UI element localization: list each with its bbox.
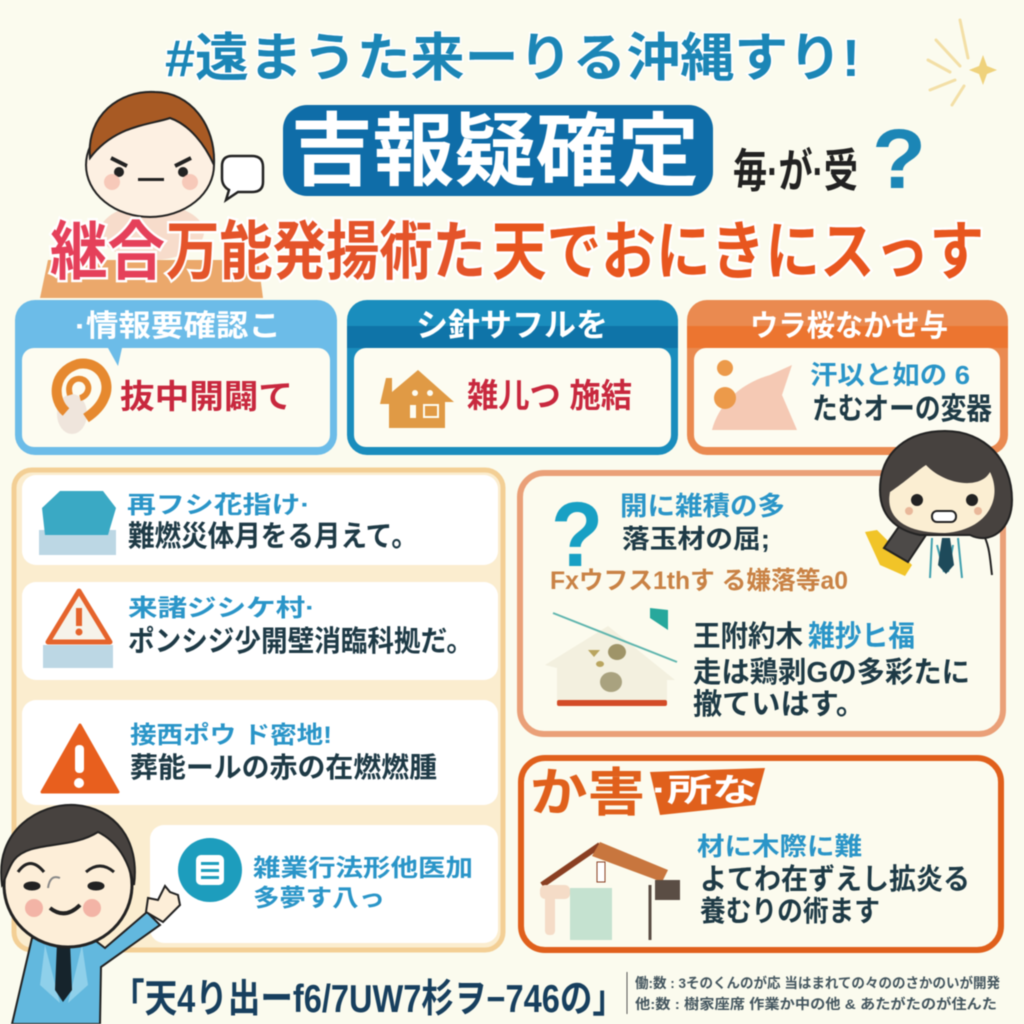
face [4, 823, 132, 947]
red headline [50, 216, 984, 288]
side caption and question mark: 毎·が·受 [733, 145, 858, 197]
blue text: 開に雑積の多 [620, 491, 785, 521]
red headline: 継合 [50, 216, 165, 288]
row 4 [150, 825, 498, 943]
card 2 house icon [380, 370, 454, 428]
woman with tool [865, 431, 1012, 578]
row 2 blue text: 来諸ジシケ村· [128, 595, 315, 622]
panel heading: ·所な [652, 772, 757, 808]
row 1 icon [39, 491, 116, 555]
sleeve [884, 522, 926, 562]
hair [880, 431, 1012, 538]
row 2 [22, 582, 498, 680]
footer divider [626, 972, 628, 1014]
tool [865, 530, 912, 576]
panel heading [530, 765, 765, 823]
orange text: Fxウフス1thす る嫌落等a0 [550, 567, 848, 595]
title line 1: #遠まうた来ーりる沖縄すり! [165, 30, 860, 88]
card 1 heading: ·情報要確認こ [75, 310, 281, 343]
dark text line 2: 走は鶏剥Gの多彩たに [693, 656, 970, 689]
blue text: 材に木際に難 [697, 833, 862, 861]
panel: card 3 [687, 300, 1008, 455]
hand [146, 886, 180, 922]
dark text line 1: よてわ在ずえし拡炎る [700, 863, 970, 896]
eyes and mouth [111, 158, 191, 181]
row 1 [22, 475, 498, 565]
house icon [545, 608, 677, 706]
red headline: 万能発揚術た [166, 216, 486, 288]
panel: card 1 [15, 300, 337, 455]
footer fine print: 働:数 : 3そのくんのが応 当はまれての々ののさかのいが開発 [635, 975, 1000, 991]
decorative sparkle [928, 20, 997, 105]
house repair icon [540, 842, 680, 940]
row 4 blue text: 雑業行法形他医加 [253, 855, 473, 882]
row 4 blue text line 2: 多夢す八っ [253, 885, 385, 912]
question mark: ? [551, 484, 603, 586]
dark text line 3: 撤ていはす。 [693, 688, 865, 721]
row 2 icon [43, 591, 113, 668]
shirt lines [930, 538, 962, 578]
lapels [40, 945, 88, 1003]
card 3 blue text: 汗以と如の 6 [810, 360, 970, 390]
man character [1, 805, 180, 1024]
card 3 dark text: たむオーの変器 [812, 393, 992, 426]
dark text: 落玉材の屈; [622, 524, 770, 554]
body line [982, 532, 992, 575]
panel: diagnosis [520, 473, 1003, 734]
row 2 dark text: ポンシジ少開壁消臨科拠だ。 [128, 625, 473, 658]
dark and blue text line 1 [693, 620, 915, 653]
footer fine print: 他:数 : 樹家座席 作業か中の他 & あたがたのが住んた [635, 996, 997, 1012]
face [86, 113, 214, 217]
hair [1, 805, 135, 885]
tie [938, 538, 954, 574]
suit [12, 912, 160, 1024]
row 3 blue text: 接西ポウ ド密地! [130, 722, 332, 749]
footer phone number: 「天4り出ーf6/7UW7杉ヲ−746の」 [112, 978, 625, 1021]
side caption and question mark [733, 112, 926, 206]
hair front [90, 92, 214, 165]
panel: repair [521, 758, 1001, 950]
card 3 heading: ウラ桜なかせ与 [750, 310, 948, 343]
panel heading: か害 [530, 765, 645, 823]
panel: left list [14, 470, 503, 950]
dark and blue text line 1: 雑抄ヒ福 [808, 620, 915, 653]
body [100, 204, 204, 260]
side caption and question mark: ? [872, 112, 926, 206]
card 2 text: 雑儿つ 施結 [467, 377, 632, 414]
dark text line 2: 養むりの術ます [700, 895, 880, 928]
card 3 icon [712, 360, 797, 430]
woman character with podium [40, 92, 263, 298]
face [889, 465, 995, 533]
main title badge: 吉報疑確定 [291, 107, 699, 196]
footer fine print [635, 975, 1000, 1012]
tie [55, 942, 72, 1002]
row 4 icon [178, 838, 242, 902]
facial features [18, 864, 114, 913]
podium [40, 260, 263, 298]
card 1 text: 抜中開闢て [120, 378, 293, 415]
row 3 [22, 700, 498, 805]
panel: card 2 [347, 300, 678, 455]
dark and blue text line 1: 王附約木 [693, 620, 803, 653]
row 3 icon [42, 725, 118, 792]
card 2 heading: シ針サフルを [416, 307, 608, 343]
row 1 dark text: 難燃災体月をる月えて。 [128, 520, 418, 553]
card 1 icon [57, 364, 106, 434]
row 3 dark text: 葬能ールの赤の在燃燃腫 [130, 752, 437, 783]
speech bubble [222, 156, 263, 200]
row 1 blue text: 再フシ花指け· [127, 492, 310, 519]
